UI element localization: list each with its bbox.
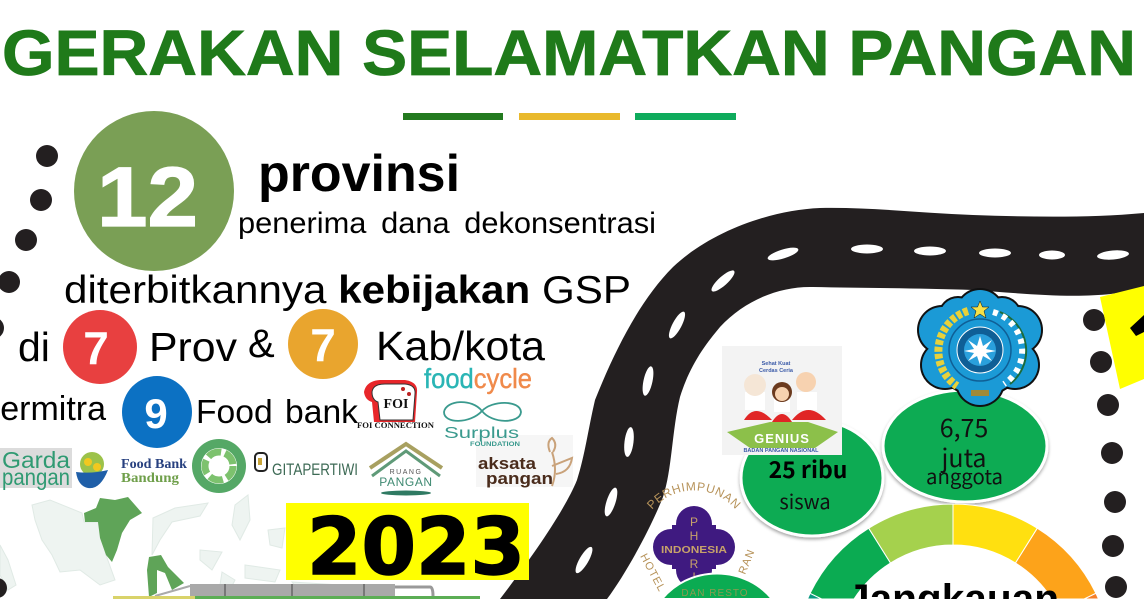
logo: Garda Pangan: pangan xyxy=(2,464,70,490)
logo: Scholars of Sustenance xyxy=(192,439,246,493)
logo: Aksata Pangan xyxy=(476,435,573,488)
dotted path left xyxy=(0,145,58,598)
road centre dashes xyxy=(573,244,1129,575)
title accent bars xyxy=(403,113,736,120)
gauge segment green xyxy=(810,528,890,599)
gauge segment teal xyxy=(808,593,822,599)
gauge segment light green xyxy=(869,504,953,563)
heading: provinsi: provinsi xyxy=(258,145,460,203)
logo: PHRI: H xyxy=(690,529,698,543)
partner row: Food bank xyxy=(196,393,359,430)
bubble: 25 ribu siswa: 25 ribu xyxy=(769,451,847,485)
logo: foodcycle: foodcycle xyxy=(424,363,532,394)
badge: 7 districts: 7 xyxy=(310,319,336,371)
logo: Genius xyxy=(722,346,842,455)
partner row xyxy=(0,376,359,448)
logo: PHRI xyxy=(637,482,758,594)
bubble: 6,75 juta anggota: 6,75 xyxy=(940,409,988,445)
policy counts row: & xyxy=(248,322,275,366)
gauge segment yellow xyxy=(953,504,1037,563)
logo: Aksata Pangan: pangan xyxy=(486,469,553,488)
badge: 7 provinces xyxy=(63,310,137,384)
text: policy line: diterbitkannya kebijakan GSP xyxy=(64,269,631,312)
gauge segment orange xyxy=(1016,528,1096,599)
logo: PHRI: I xyxy=(692,570,696,584)
badge: 9 food banks xyxy=(122,376,192,448)
logo: Food Bank Bandung: Bandung xyxy=(121,471,179,486)
road xyxy=(500,208,1144,599)
logo: Ruang Pangan: RUANG xyxy=(390,469,422,476)
yellow number tag clipped at right edge xyxy=(1100,286,1144,389)
logo: Genius: Sehat Kuat xyxy=(762,361,791,367)
badge: 7 provinces: 7 xyxy=(83,322,109,374)
dotted path right xyxy=(1083,309,1127,598)
logo: Ruang Pangan: PANGAN xyxy=(379,475,433,489)
map of Indonesia xyxy=(0,495,340,597)
logo: Genius: GENIUS xyxy=(754,431,810,446)
bubble: PHRI members (clipped): DAN RESTO xyxy=(681,588,749,599)
train illustration xyxy=(113,584,480,599)
bubble: 25 ribu siswa: siswa xyxy=(779,486,831,515)
logo: Gita Pertiwi xyxy=(255,453,358,479)
logo: Ruang Pangan xyxy=(370,444,442,496)
logo: Aksata Pangan: aksata xyxy=(478,454,537,473)
logo: Garda Pangan: Garda xyxy=(2,447,70,473)
logo: Genius: BADAN PANGAN NASIONAL xyxy=(743,448,819,454)
highlighted province: Sulawesi xyxy=(147,555,184,597)
logo: PHRI: RAN xyxy=(737,547,758,576)
logo: FOI connection: FOI xyxy=(384,397,408,412)
badge: 12 provinces xyxy=(74,111,234,271)
logo: Surplus Foundation xyxy=(444,402,521,448)
logo: Surplus Foundation: FOUNDATION xyxy=(470,442,520,448)
title: GERAKAN SELAMATKAN PANGAN xyxy=(2,17,1136,89)
highlighted province: Kalimantan xyxy=(84,497,142,562)
logo: Gita Pertiwi: GITAPERTIWI xyxy=(272,460,358,479)
logo: Surplus Foundation: Surplus xyxy=(444,425,519,442)
year label 2023: 2023 xyxy=(307,503,525,593)
badge: 12 provinces: 12 xyxy=(97,150,198,244)
badge: 7 districts xyxy=(288,309,358,379)
logo: Garda Pangan xyxy=(0,447,108,490)
gauge segment dark orange xyxy=(1084,593,1098,599)
logo: PHRI: P xyxy=(690,515,698,529)
badge: 9 food banks: 9 xyxy=(144,390,168,437)
policy counts row: Prov xyxy=(149,324,238,370)
logo: PHRI: R xyxy=(690,557,699,571)
policy counts row: di xyxy=(18,324,50,370)
bubble: 6,75 juta anggota: anggota xyxy=(926,461,1003,490)
bubble: 6,75 juta anggota: juta xyxy=(940,439,986,475)
gauge: reach xyxy=(808,504,1098,599)
logo: PHRI: PERHIMPUNAN xyxy=(646,482,741,509)
bubble: 6,75 juta anggota xyxy=(883,390,1047,502)
text: penerima dana dekonsentrasi: penerima dana dekonsentrasi xyxy=(238,207,656,240)
emblem: PKK crest xyxy=(917,288,1043,407)
logo: Food Bank Bandung: Food Bank xyxy=(121,457,187,472)
logo: PHRI: INDONESIA xyxy=(661,544,727,556)
policy counts row xyxy=(18,309,545,384)
logo: Food Bank Bandung xyxy=(121,457,187,486)
policy counts row: Kab/kota xyxy=(376,323,545,369)
bubble: 25 ribu siswa xyxy=(741,420,883,536)
logo: PHRI: HOTEL xyxy=(637,552,668,594)
logo: Genius: Cerdas Ceria xyxy=(759,368,794,374)
logo: FOI connection: FOI CONNECTION xyxy=(357,421,434,430)
bubble: PHRI members (clipped) xyxy=(662,573,772,599)
logo: FOI connection xyxy=(357,380,434,430)
